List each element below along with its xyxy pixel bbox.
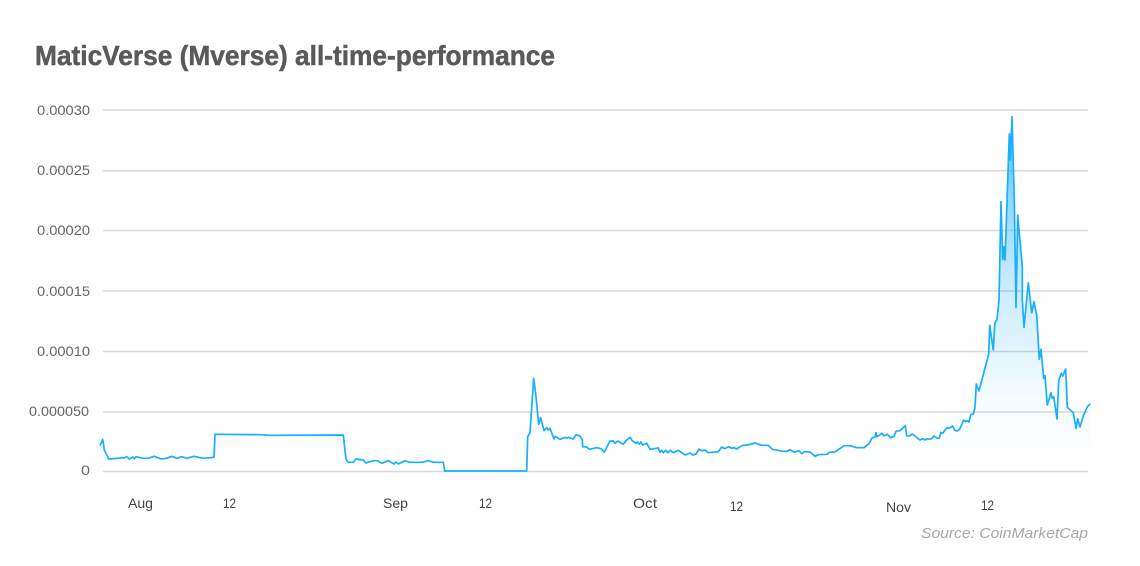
x axis labels: 12 (981, 497, 994, 513)
y axis labels: 0.00010 (37, 343, 90, 359)
x axis labels: Sep (383, 495, 408, 511)
y axis labels: 0.000050 (29, 403, 89, 419)
x axis labels: 12 (730, 498, 743, 514)
y axis labels: 0.00020 (37, 222, 90, 238)
x axis labels (128, 495, 994, 515)
x axis labels: Oct (633, 495, 657, 511)
source note: Source: CoinMarketCap (921, 525, 1088, 542)
y axis labels: 0.00030 (37, 102, 90, 118)
y axis labels (29, 102, 90, 478)
title: MaticVerse (Mverse) all-time-performance (35, 40, 555, 71)
area fill (100, 117, 1090, 472)
x axis labels: Nov (886, 499, 911, 515)
price line (100, 117, 1090, 471)
x axis labels: Aug (128, 495, 153, 511)
y axis labels: 0 (81, 462, 90, 478)
y axis labels: 0.00015 (37, 283, 90, 299)
x axis labels: 12 (223, 495, 236, 511)
chart: all-time price (29, 102, 1090, 515)
y axis labels: 0.00025 (37, 162, 90, 178)
x axis labels: 12 (479, 495, 492, 511)
